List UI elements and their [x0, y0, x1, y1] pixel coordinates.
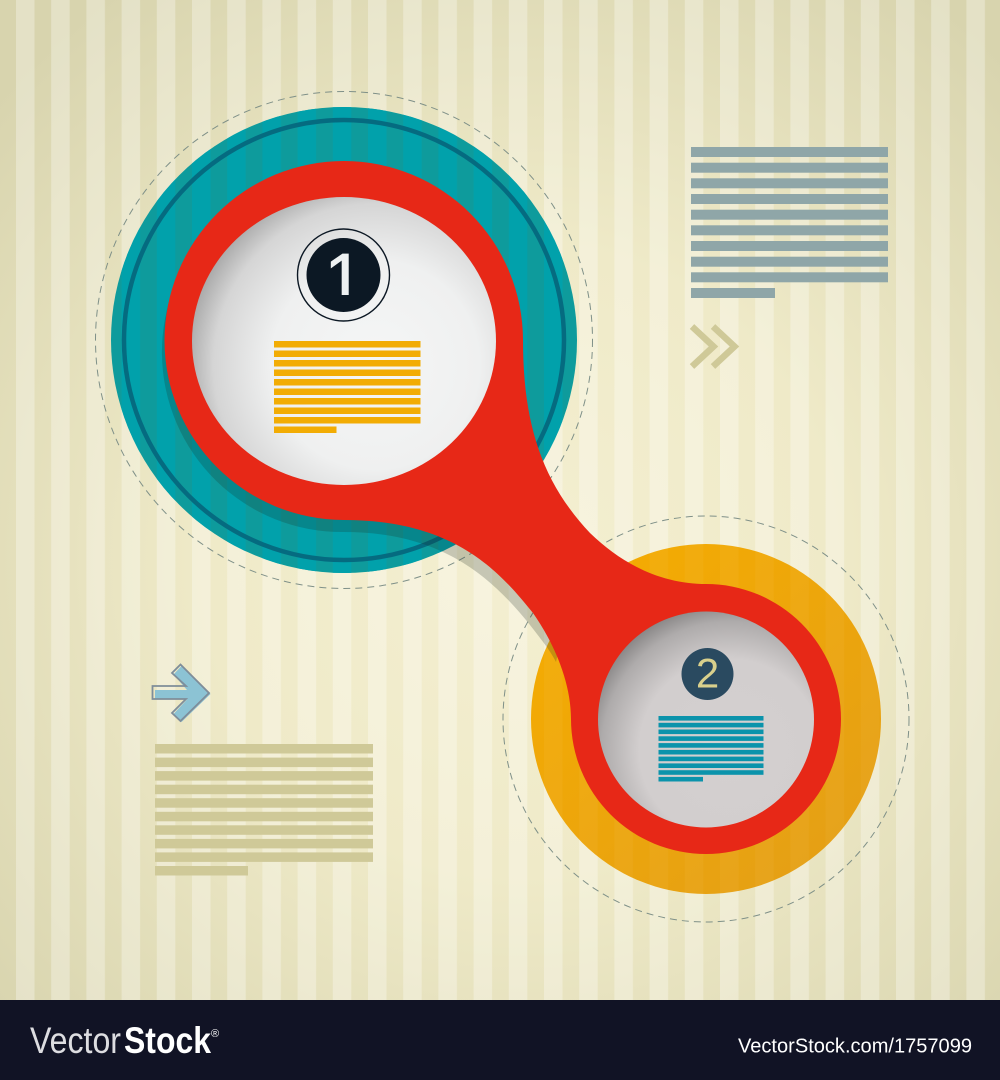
footer bar: VectorStock.com/1757099 [738, 1036, 972, 1058]
number badge 2 [682, 648, 734, 700]
white panel: step 1 [192, 197, 496, 485]
footer bar [0, 1000, 1000, 1080]
text lines: bottom left block [155, 744, 373, 876]
connector shadow [162, 172, 565, 662]
footer bar: Stock [124, 1020, 211, 1061]
number badge 1 [298, 229, 390, 321]
footer bar: Vector [30, 1020, 121, 1061]
white panel: step 2 [598, 612, 814, 828]
text lines: step 2 [658, 716, 764, 782]
dashed ring: top circle [96, 92, 592, 588]
red connector shape [164, 161, 841, 854]
number badge 1: 1 [325, 239, 363, 317]
number badge 2: 2 [696, 650, 719, 696]
icon: blue arrow [152, 664, 210, 722]
icon: double chevron [692, 326, 734, 366]
text lines: top right block [691, 147, 888, 298]
teal circle [111, 107, 577, 573]
text lines: step 1 [274, 341, 420, 433]
dashed ring: bottom circle [503, 516, 909, 922]
orange circle [531, 544, 881, 894]
footer bar: ® [211, 1028, 219, 1040]
